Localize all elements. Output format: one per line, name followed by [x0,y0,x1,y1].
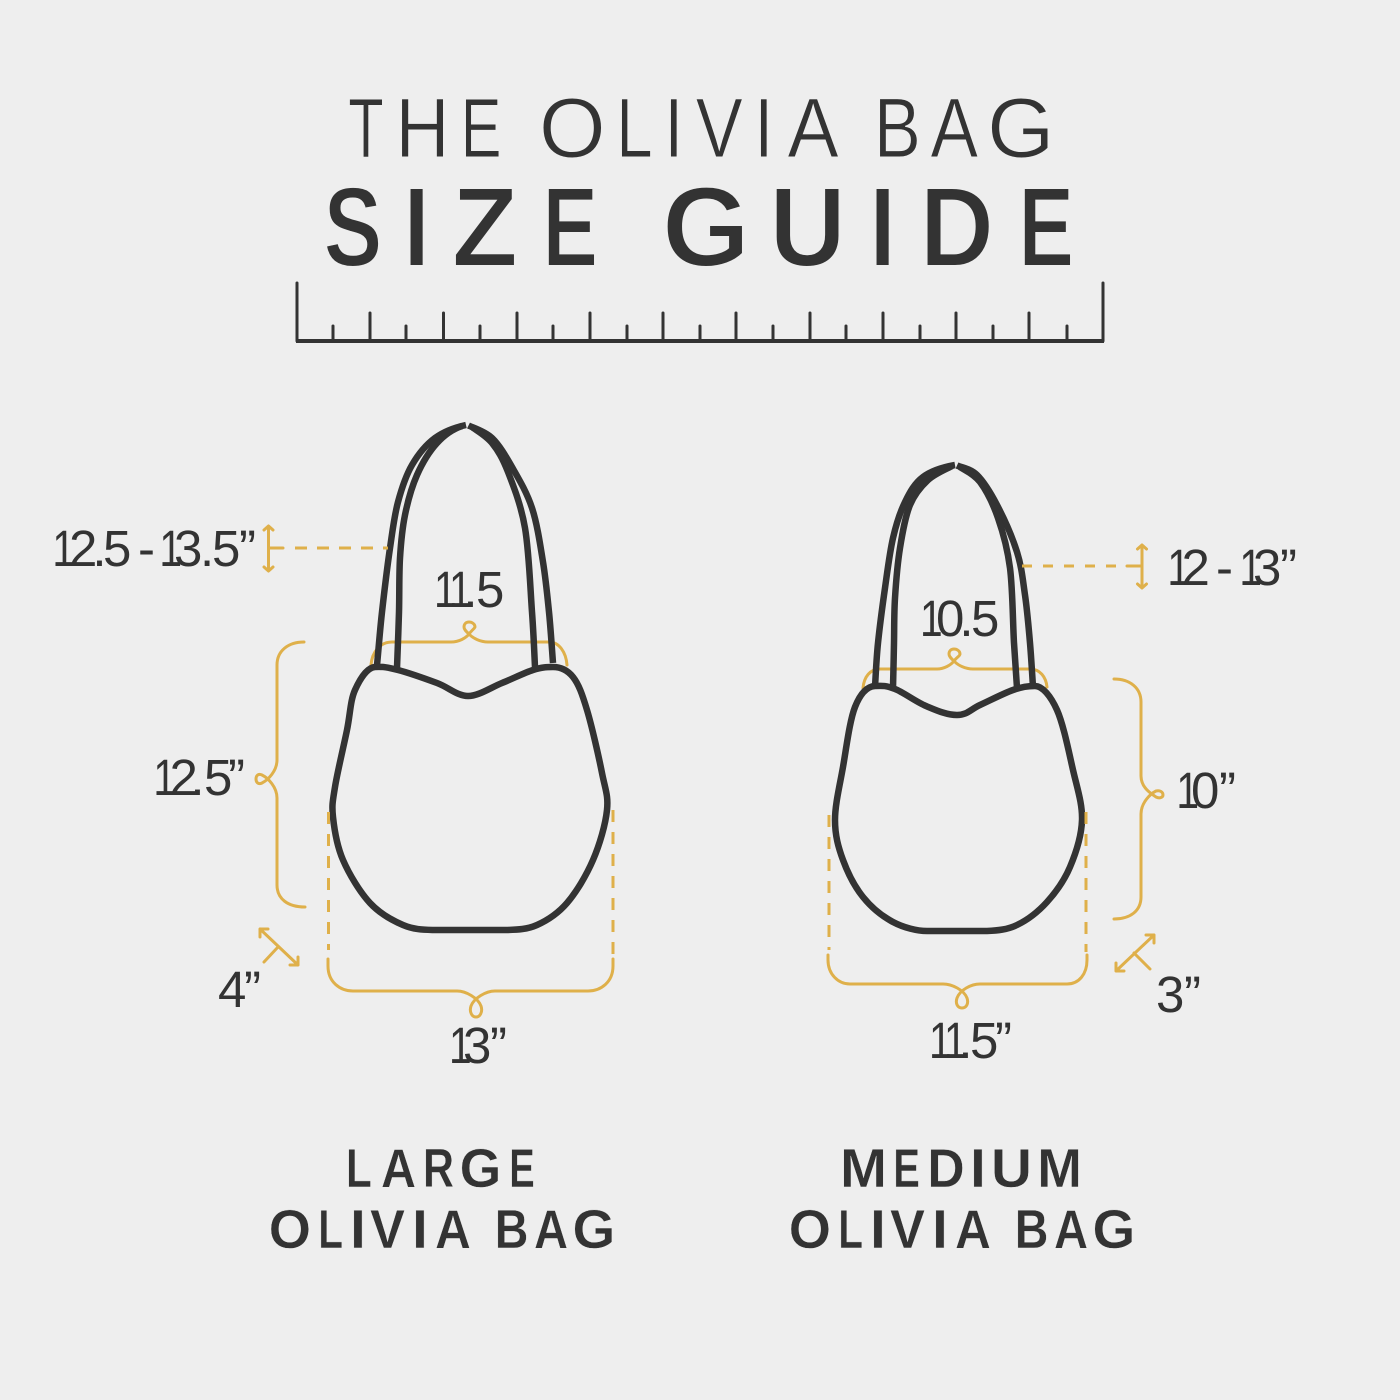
name: large olivia bag: A [534,1198,568,1260]
name: large olivia bag: E [509,1137,535,1199]
title line: the olivia bag: B [874,81,921,175]
strap width label: medium: 1 [920,590,943,647]
strap drop measure: large [264,526,388,571]
name: medium olivia bag: I [970,1137,986,1199]
bag body: medium [835,686,1082,931]
depth label: large: 4” [218,961,261,1018]
width brace: large [328,959,613,1017]
strap drop label: medium: 3” [1253,539,1297,596]
title line: size guide: S [324,164,382,290]
width brace: medium [828,955,1087,1008]
height label: large: 2.5” [170,749,245,806]
title line: the olivia bag: V [696,81,743,175]
name: large olivia bag: G [572,1198,615,1260]
name: medium olivia bag: D [927,1137,965,1199]
name: medium olivia bag: U [991,1137,1032,1199]
name: large olivia bag: A [435,1198,470,1260]
title line: size guide: I [869,164,896,290]
top width brace: large [371,622,567,665]
handles: medium [875,465,1033,688]
name: large olivia bag: L [318,1198,343,1260]
width label: medium: 1 [929,1012,952,1069]
title line: size guide: E [1018,164,1074,290]
name: large olivia bag: B [495,1198,528,1260]
name: medium olivia bag: E [893,1137,920,1199]
bag body: large [332,667,607,930]
name: medium olivia bag: O [789,1198,831,1260]
name: medium olivia bag [789,1137,1135,1260]
strap drop label: large: 1 [52,520,75,577]
title line: the olivia bag: T [348,81,384,175]
top width brace: medium [863,649,1047,688]
name: large olivia bag: O [269,1198,311,1260]
title line: the olivia bag: G [987,81,1054,175]
name: medium olivia bag: M [840,1137,887,1199]
title line: the olivia bag: I [754,81,773,175]
name: medium olivia bag: I [870,1198,886,1260]
name: medium olivia bag: A [955,1198,990,1260]
strap width label: large: 1 [449,561,472,618]
strap drop label: large: 1 [159,520,182,577]
height label: large: 1 [153,749,176,806]
name: medium olivia bag: M [1037,1137,1082,1199]
strap drop measure: medium [1022,545,1146,588]
title line: size guide: Z [452,164,518,290]
depth arrow: medium [1116,935,1154,971]
name: medium olivia bag: L [838,1198,863,1260]
width label: medium: 1 [944,1012,967,1069]
title line: size guide: U [769,164,846,290]
height label: medium: 1 [1176,762,1199,819]
strap width label: large: 1 [434,561,457,618]
width label: large: 3” [463,1017,507,1074]
name: large olivia bag: A [381,1137,416,1199]
title line: size guide: E [542,164,598,290]
height label: medium: 0” [1191,762,1236,819]
name: medium olivia bag: A [1054,1198,1088,1260]
depth label: medium: 3” [1156,966,1201,1023]
medium bag diagram [789,465,1297,1260]
name: medium olivia bag: B [1015,1198,1048,1260]
height brace: large [256,642,305,907]
handles: large [377,425,553,668]
title line: the olivia bag: L [616,81,653,175]
strap drop label: medium: 1 [1167,539,1190,596]
title line: the olivia bag: H [396,81,450,175]
title line: the olivia bag: E [461,81,502,175]
name: large olivia bag: I [412,1198,428,1260]
name: medium olivia bag: V [890,1198,925,1260]
title line: size guide: I [403,164,430,290]
strap width label: large: .5 [463,561,504,618]
title line: the olivia bag: I [664,81,683,175]
strap drop label: large: 3.5” [174,520,256,577]
name: large olivia bag: V [370,1198,405,1260]
name: large olivia bag: G [460,1137,501,1199]
width label: medium: .5” [958,1012,1012,1069]
name: medium olivia bag: G [1092,1198,1135,1260]
width guides: large [328,810,613,955]
title line: size guide: D [920,164,994,290]
name: large olivia bag: R [423,1137,454,1199]
strap drop label: large: 2.5 - [69,520,166,577]
name: large olivia bag: L [346,1137,372,1199]
width label: large: 1 [449,1017,472,1074]
width guides: medium [829,812,1086,952]
large bag diagram [52,425,615,1260]
name: large olivia bag: I [350,1198,366,1260]
strap drop label: medium: 1 [1239,539,1262,596]
ruler [296,283,1104,341]
title line: the olivia bag: A [788,81,839,175]
height brace: medium [1114,679,1163,919]
strap drop label: medium: 2 - [1182,539,1246,596]
title line: size guide: G [662,164,750,290]
name: large olivia bag [269,1137,615,1260]
title line: the olivia bag: O [539,81,606,175]
title line: the olivia bag: A [930,81,978,175]
depth arrow: large [260,929,298,965]
title [324,81,1074,290]
name: medium olivia bag: I [932,1198,948,1260]
strap width label: medium: 0.5 [936,590,999,647]
